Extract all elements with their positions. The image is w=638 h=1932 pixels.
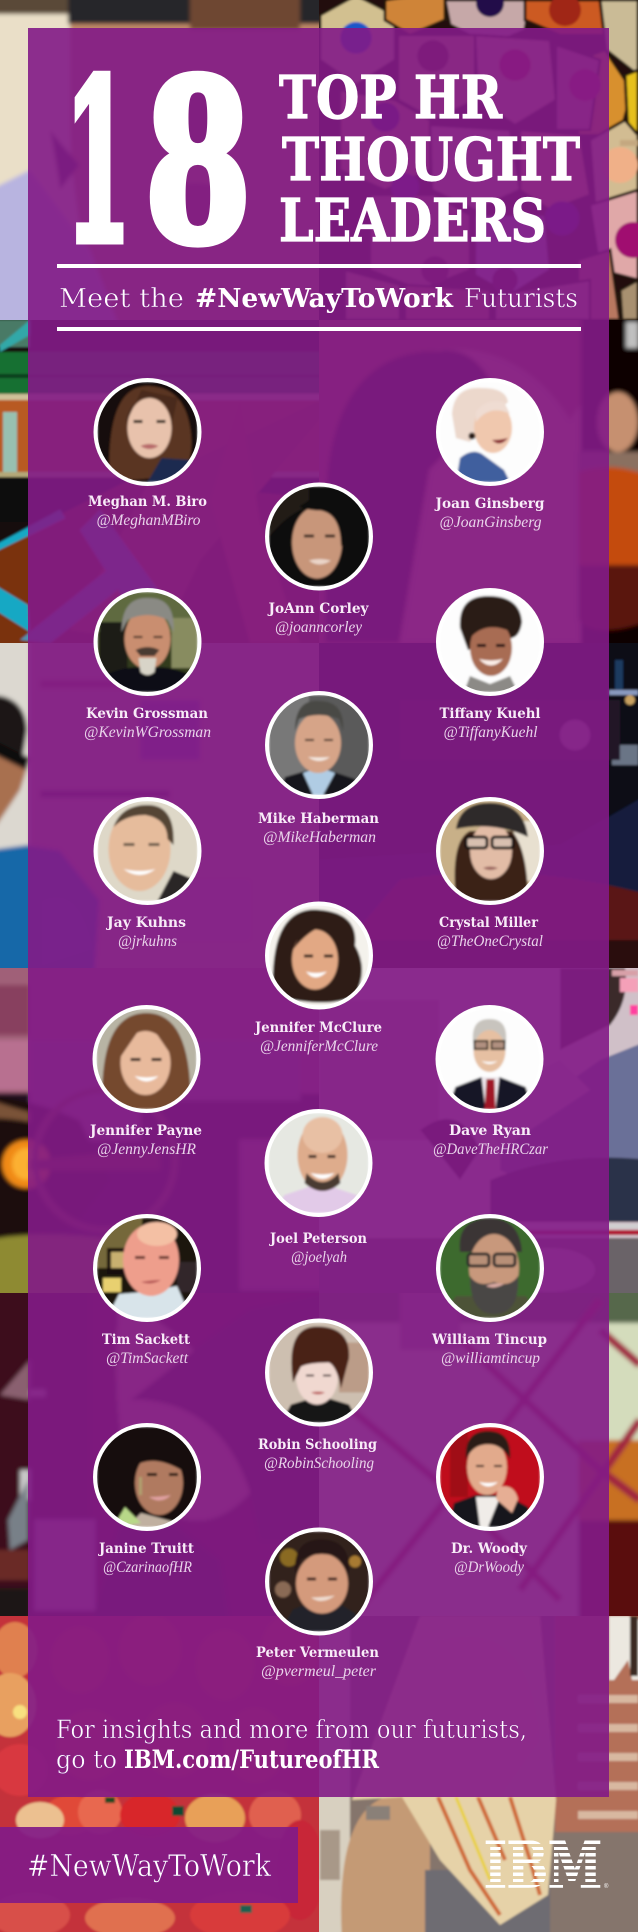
portrait [436, 1214, 544, 1322]
futurist: Joan Ginsberg [434, 378, 545, 531]
portrait [265, 1318, 373, 1426]
name: Meghan M. Biro [88, 494, 207, 510]
IBM logo: ® [604, 1883, 609, 1890]
portrait [436, 588, 544, 696]
background photo: man with glasses at a window [0, 635, 330, 975]
name: Jennifer McClure [253, 1020, 382, 1036]
call to action: For insights and more from our futurists, [56, 1715, 527, 1744]
name: Jay Kuhns [105, 915, 186, 931]
handle: @RobinSchooling [264, 1455, 374, 1472]
name: William Tincup [431, 1332, 547, 1348]
call to action [56, 1715, 527, 1774]
futurist: Tiffany Kuehl [436, 588, 544, 741]
portrait [436, 378, 544, 486]
futurist: Joel Peterson [264, 1109, 372, 1266]
background photo: city street at night [560, 643, 638, 968]
portrait [265, 691, 373, 799]
portrait [92, 1005, 200, 1113]
portrait [265, 902, 373, 1010]
background photo: smiling woman [0, 1293, 249, 1616]
background photo: red chain link fence [310, 1285, 638, 1625]
background photo: coloured pencils [310, 0, 638, 330]
futurist: William Tincup [431, 1214, 547, 1367]
background photo: printing trays and books [0, 310, 330, 650]
hashtag bar [0, 1827, 298, 1903]
name: Peter Vermeulen [256, 1645, 379, 1661]
futurist: Janine Truitt [93, 1423, 201, 1576]
name: Tim Sackett [102, 1332, 190, 1348]
futurist: Kevin Grossman [84, 588, 211, 741]
handle: @CzarinaofHR [103, 1559, 192, 1576]
portrait [436, 1005, 544, 1113]
call to action: go to [56, 1745, 117, 1774]
call to action: IBM.com/FutureofHR [124, 1745, 379, 1774]
subtitle: Meet the [59, 284, 184, 314]
handle: @joanncorley [275, 619, 362, 636]
handle: @DrWoody [454, 1559, 524, 1576]
handle: @DaveTheHRCzar [433, 1141, 549, 1158]
handle: @JennyJensHR [97, 1141, 197, 1158]
handle: @joelyah [291, 1249, 347, 1266]
portrait [436, 797, 544, 905]
portrait [93, 1423, 201, 1531]
hashtag bar: #NewWayToWork [27, 1849, 272, 1884]
handle: @TheOneCrystal [437, 933, 543, 950]
background photo: glass blowing [0, 960, 330, 1300]
name: Jennifer Payne [88, 1123, 202, 1139]
subtitle: #NewWayToWork [195, 284, 454, 314]
name: Robin Schooling [258, 1437, 377, 1453]
portrait [265, 482, 373, 590]
background photo: man in lavender shirt [0, 0, 330, 330]
name: Janine Truitt [97, 1541, 195, 1557]
name: Dr. Woody [451, 1541, 528, 1557]
handle: @TimSackett [106, 1350, 189, 1367]
handle: @KevinWGrossman [84, 724, 211, 741]
background photo: strawberries [0, 1610, 330, 1932]
big number 18: 8 [145, 33, 251, 293]
portrait [264, 1109, 372, 1217]
portrait [94, 797, 202, 905]
futurist: Robin Schooling [258, 1318, 377, 1472]
futurist: Jennifer McClure [253, 902, 382, 1055]
name: Crystal Miller [439, 915, 539, 931]
subtitle: Futurists [464, 284, 578, 314]
name: Joan Ginsberg [434, 496, 545, 512]
big number 18: 1 [65, 33, 131, 293]
background photo: person with pink sign [310, 960, 638, 1300]
name: Joel Peterson [268, 1231, 367, 1247]
portrait [93, 1214, 201, 1322]
futurist: Tim Sackett [93, 1214, 201, 1367]
title line 2: THOUGHT [282, 125, 580, 194]
handle: @JenniferMcClure [260, 1038, 378, 1055]
portrait [94, 588, 202, 696]
background photo: blonde woman with brick wall [310, 1610, 638, 1932]
futurist: Jennifer Payne [88, 1005, 202, 1158]
futurist: JoAnn Corley [265, 482, 373, 636]
futurist: Dr. Woody [436, 1423, 544, 1576]
handle: @MeghanMBiro [96, 512, 201, 529]
name: Tiffany Kuehl [440, 706, 540, 722]
futurist: Mike Haberman [258, 691, 379, 846]
handle: @pvermeul_peter [261, 1663, 377, 1680]
portrait [436, 1423, 544, 1531]
futurist: Dave Ryan [433, 1005, 549, 1158]
handle: @TiffanyKuehl [444, 724, 538, 741]
subtitle [59, 284, 578, 314]
background photo: person with ear and orange top [310, 310, 638, 650]
title line 1: TOP HR [279, 63, 503, 132]
futurist: Meghan M. Biro [88, 378, 207, 529]
futurist: Crystal Miller [436, 797, 544, 950]
futurist: Jay Kuhns [94, 797, 202, 950]
IBM logo: IBM [484, 1828, 602, 1902]
futurist: Peter Vermeulen [256, 1528, 379, 1680]
handle: @williamtincup [441, 1350, 540, 1367]
headline [65, 33, 580, 293]
handle: @JoanGinsberg [440, 514, 542, 531]
portrait [265, 1528, 373, 1636]
handle: @jrkuhns [118, 933, 177, 950]
title line 3: LEADERS [279, 186, 546, 255]
name: Kevin Grossman [86, 706, 208, 722]
handle: @MikeHaberman [263, 829, 376, 846]
name: JoAnn Corley [267, 601, 369, 617]
portrait [94, 378, 202, 486]
name: Dave Ryan [449, 1123, 531, 1139]
name: Mike Haberman [258, 811, 379, 827]
